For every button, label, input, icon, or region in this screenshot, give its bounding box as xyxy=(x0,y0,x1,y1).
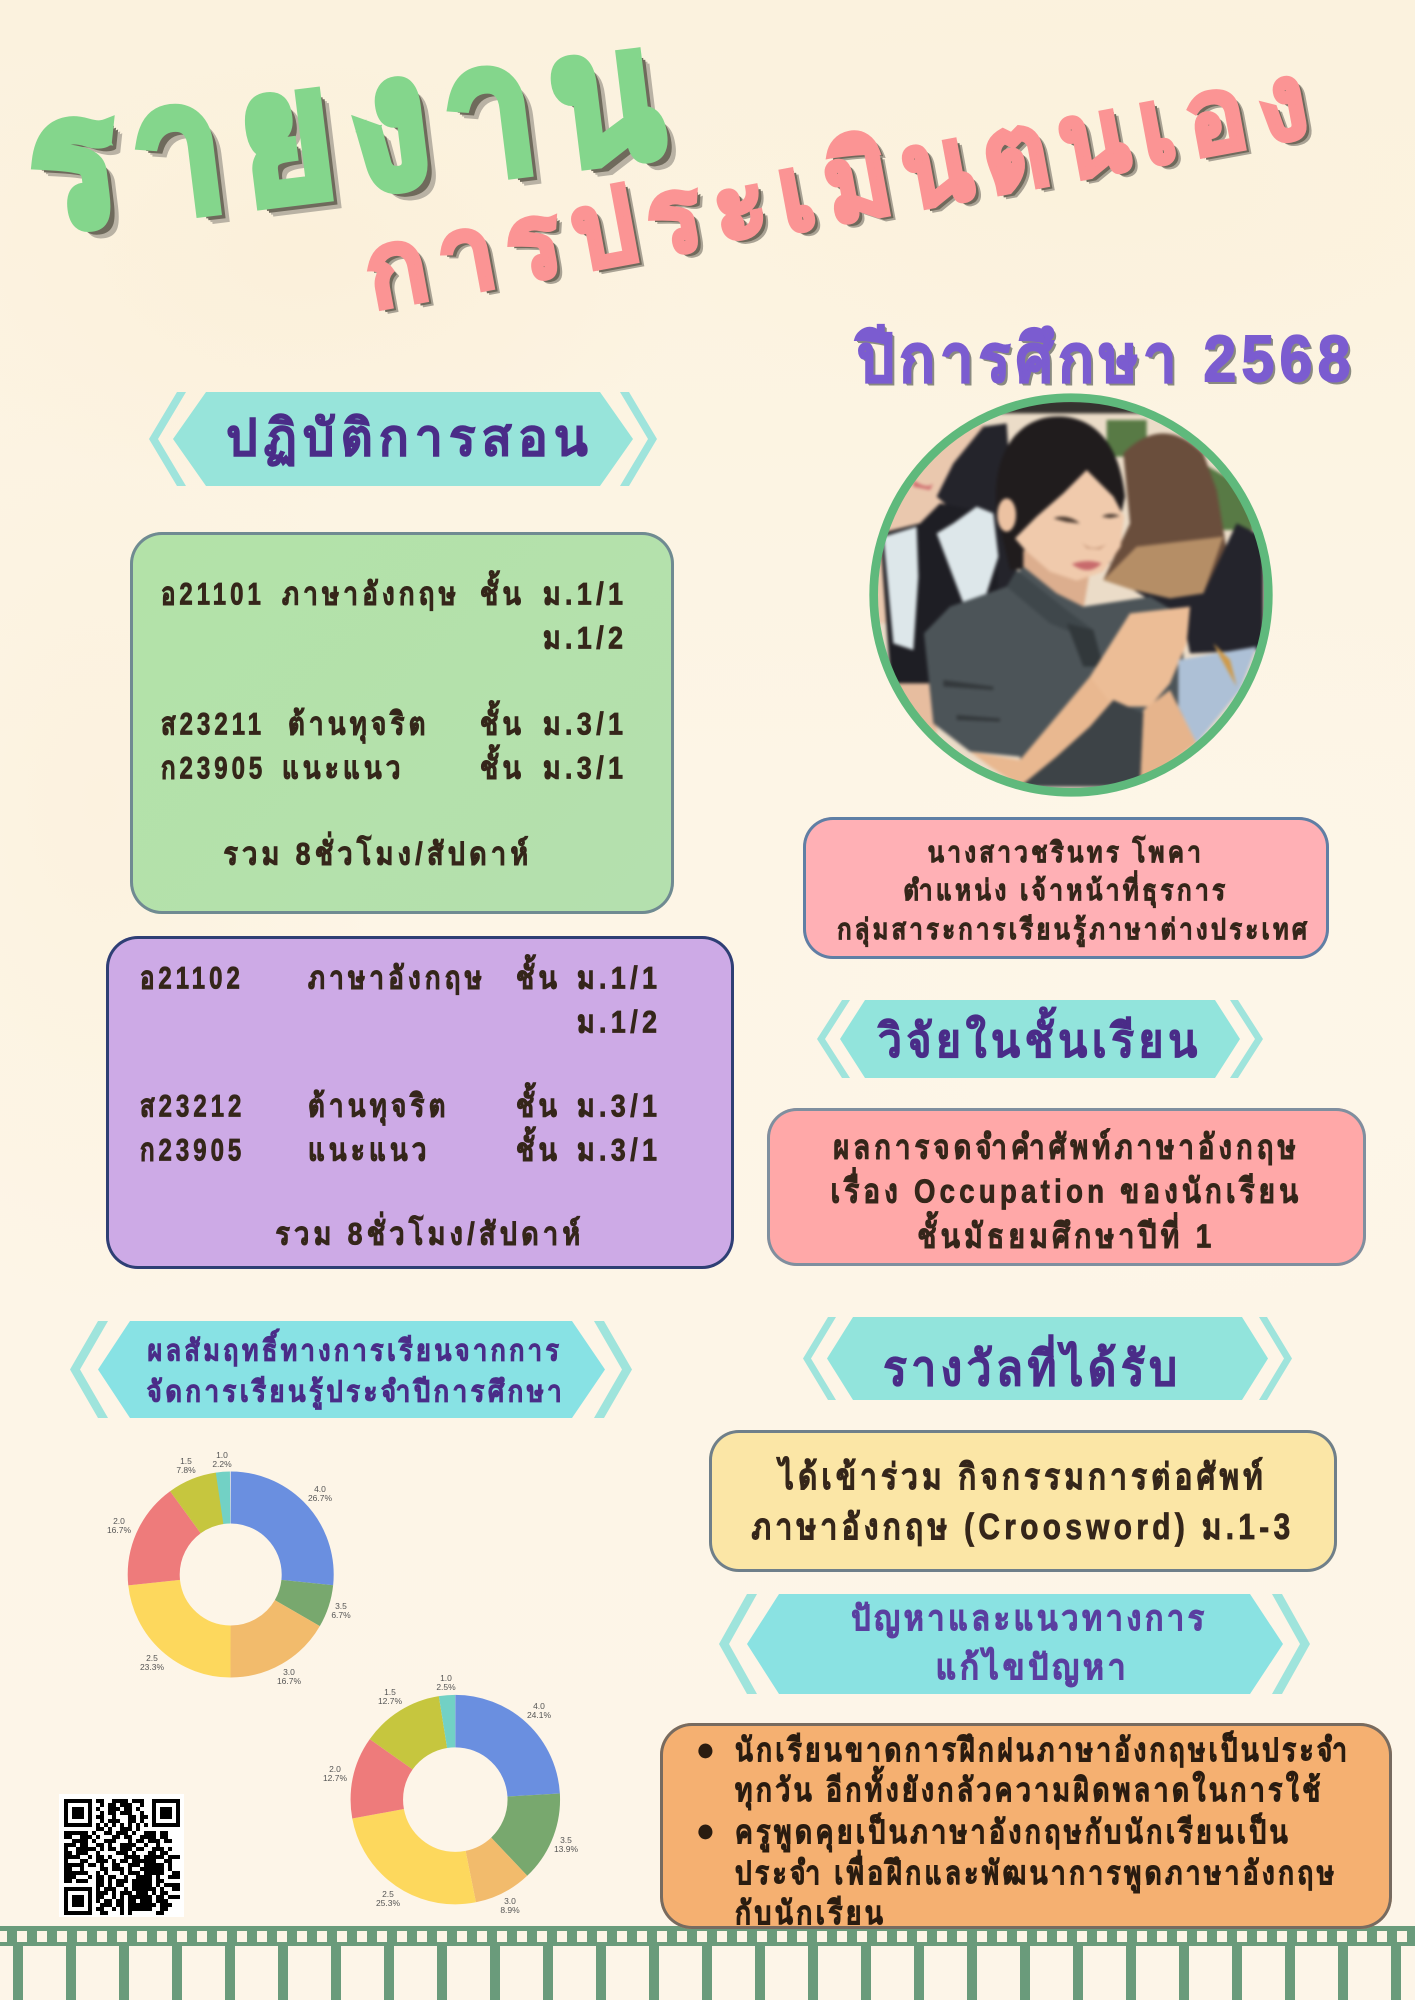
banner: learning results: จัดการเรียนรู้ประจำปีการศึกษา xyxy=(147,1375,565,1408)
panel: problems list: ● xyxy=(696,1731,719,1767)
panel: second semester courses: ชั้น xyxy=(516,1089,561,1124)
panel: research topic: ผลการจดจำคำศัพท์ภาษาอังกฤษ xyxy=(833,1128,1300,1166)
banner: teaching: ปฏิบัติการสอน xyxy=(226,411,594,467)
panel: research topic xyxy=(767,1108,1366,1266)
title: self assessment: การประเมินตนเอง xyxy=(356,39,1329,331)
donut chart 1: 2.0 xyxy=(113,1516,125,1526)
donut chart 2: 4.0 xyxy=(533,1701,545,1711)
panel: name and position: ตำแหน่ง เจ้าหน้าที่ธุรการ xyxy=(903,875,1229,907)
donut chart 1: 26.7% xyxy=(308,1493,332,1503)
panel: second semester courses: แนะแนว xyxy=(308,1133,431,1168)
donut chart 1: 1.5 xyxy=(180,1456,192,1466)
donut chart 2 xyxy=(323,1673,578,1915)
panel: award detail: ภาษาอังกฤษ (Croosword) ม.1-3 xyxy=(751,1508,1295,1548)
panel: second semester courses: ชั้น xyxy=(516,961,561,996)
donut chart 2: 25.3% xyxy=(376,1898,400,1908)
panel: first semester courses: ชั้น xyxy=(480,577,525,612)
banner: awards xyxy=(803,1317,1292,1400)
donut chart 2: 13.9% xyxy=(554,1844,578,1854)
donut chart 2: 24.1% xyxy=(527,1710,551,1720)
panel: first semester courses: อ21101 xyxy=(161,577,265,612)
panel: research topic: ชั้นมัธยมศึกษาปีที่ 1 xyxy=(917,1217,1216,1255)
banner: classroom research xyxy=(817,1000,1263,1078)
panel: problems list: ทุกวัน อีกทั้งยังกลัวความผิดพลาดในการใช้ xyxy=(735,1772,1324,1808)
panel: first semester courses: ส23211 xyxy=(161,707,265,742)
banner: problems and solutions xyxy=(719,1594,1310,1694)
donut chart 1: 7.8% xyxy=(176,1465,196,1475)
film strip border xyxy=(0,1926,1415,2000)
donut chart 1: 16.7% xyxy=(107,1525,131,1535)
panel: second semester courses: อ21102 xyxy=(140,961,244,996)
panel: first semester courses: ต้านทุจริต xyxy=(288,707,430,742)
banner: teaching xyxy=(149,392,657,486)
panel: problems list xyxy=(660,1723,1392,1929)
donut chart 1: 2.5 xyxy=(146,1653,158,1663)
panel: problems list: ● xyxy=(696,1812,719,1848)
panel: second semester courses: ภาษาอังกฤษ xyxy=(308,961,486,996)
panel: name and position: กลุ่มสาระการเรียนรู้ภาษาต่างประเทศ xyxy=(837,914,1310,946)
donut chart 2: 12.7% xyxy=(378,1696,402,1706)
panel: second semester courses: ม.3/1 xyxy=(577,1089,661,1124)
academic year: ปีการศึกษา 2568 xyxy=(857,323,1356,395)
donut chart 1: 2.2% xyxy=(212,1459,232,1469)
donut chart 1: 3.5 xyxy=(335,1601,347,1611)
donut chart 2: 12.7% xyxy=(323,1773,347,1783)
panel: problems list: ครูพูดคุยเป็นภาษาอังกฤษกับนักเรียนเป็น xyxy=(735,1814,1291,1850)
donut chart 1: 16.7% xyxy=(277,1676,301,1686)
donut chart 1: 23.3% xyxy=(140,1662,164,1672)
panel: first semester courses: ม.1/2 xyxy=(543,621,627,656)
QR code xyxy=(59,1794,184,1917)
panel: second semester courses: ก23905 xyxy=(140,1133,245,1168)
donut chart 1: 3.0 xyxy=(283,1667,295,1677)
panel: first semester courses: ม.1/1 xyxy=(543,577,627,612)
banner: learning results xyxy=(70,1321,632,1418)
panel: first semester courses xyxy=(130,532,674,914)
panel: name and position xyxy=(803,817,1329,959)
donut chart 1: 4.0 xyxy=(314,1484,326,1494)
panel: problems list: กับนักเรียน xyxy=(735,1895,886,1931)
donut chart 1: 1.0 xyxy=(216,1450,228,1460)
banner: problems and solutions: แก้ไขปัญหา xyxy=(936,1647,1129,1686)
donut chart 2: 3.5 xyxy=(560,1835,572,1845)
panel: second semester courses xyxy=(106,936,734,1269)
panel: award detail: ได้เข้าร่วม กิจกรรมการต่อศัพท์ xyxy=(779,1458,1267,1498)
panel: research topic: เรื่อง Occupation ของนักเรียน xyxy=(831,1172,1302,1210)
panel: first semester courses: ก23905 xyxy=(161,751,266,786)
donut chart 2: 2.0 xyxy=(329,1764,341,1774)
photo portrait xyxy=(869,393,1273,797)
panel: first semester courses: ม.3/1 xyxy=(543,707,627,742)
panel: second semester courses: ม.3/1 xyxy=(577,1133,661,1168)
panel: second semester courses: รวม 8ชั่วโมง/สัปดาห์ xyxy=(275,1217,585,1252)
panel: second semester courses: ม.1/1 xyxy=(577,961,661,996)
panel: first semester courses: รวม 8ชั่วโมง/สัปดาห์ xyxy=(223,837,533,872)
panel: second semester courses: ม.1/2 xyxy=(577,1005,661,1040)
panel: second semester courses: ชั้น xyxy=(516,1133,561,1168)
donut chart 2: 1.5 xyxy=(384,1687,396,1697)
donut chart 2: 2.5 xyxy=(382,1889,394,1899)
donut chart 1 xyxy=(107,1450,351,1686)
panel: award detail xyxy=(709,1430,1337,1572)
banner: awards: รางวัลที่ได้รับ xyxy=(883,1341,1182,1396)
donut chart 2: 3.0 xyxy=(504,1896,516,1906)
panel: first semester courses: ชั้น xyxy=(480,751,525,786)
banner: problems and solutions: ปัญหาและแนวทางการ xyxy=(851,1598,1208,1637)
banner: classroom research: วิจัยในชั้นเรียน xyxy=(878,1015,1202,1067)
banner: learning results: ผลสัมฤทธิ์ทางการเรียนจากการ xyxy=(148,1334,562,1367)
panel: name and position: นางสาวชรินทร โพคา xyxy=(928,837,1204,869)
donut chart 2: 2.5% xyxy=(436,1682,456,1692)
panel: problems list: ประจำ เพื่อฝึกและพัฒนาการพูดภาษาอังกฤษ xyxy=(735,1855,1337,1891)
panel: first semester courses: แนะแนว xyxy=(282,751,405,786)
panel: first semester courses: ภาษาอังกฤษ xyxy=(282,577,460,612)
panel: first semester courses: ม.3/1 xyxy=(543,751,627,786)
panel: first semester courses: ชั้น xyxy=(480,707,525,742)
donut chart 2: 1.0 xyxy=(440,1673,452,1683)
panel: second semester courses: ส23212 xyxy=(140,1089,245,1124)
donut chart 1: 6.7% xyxy=(331,1610,351,1620)
donut chart 2: 8.9% xyxy=(500,1905,520,1915)
panel: second semester courses: ต้านทุจริต xyxy=(308,1089,450,1124)
panel: problems list: นักเรียนขาดการฝึกฝนภาษาอังกฤษเป็นประจำ xyxy=(735,1732,1350,1768)
